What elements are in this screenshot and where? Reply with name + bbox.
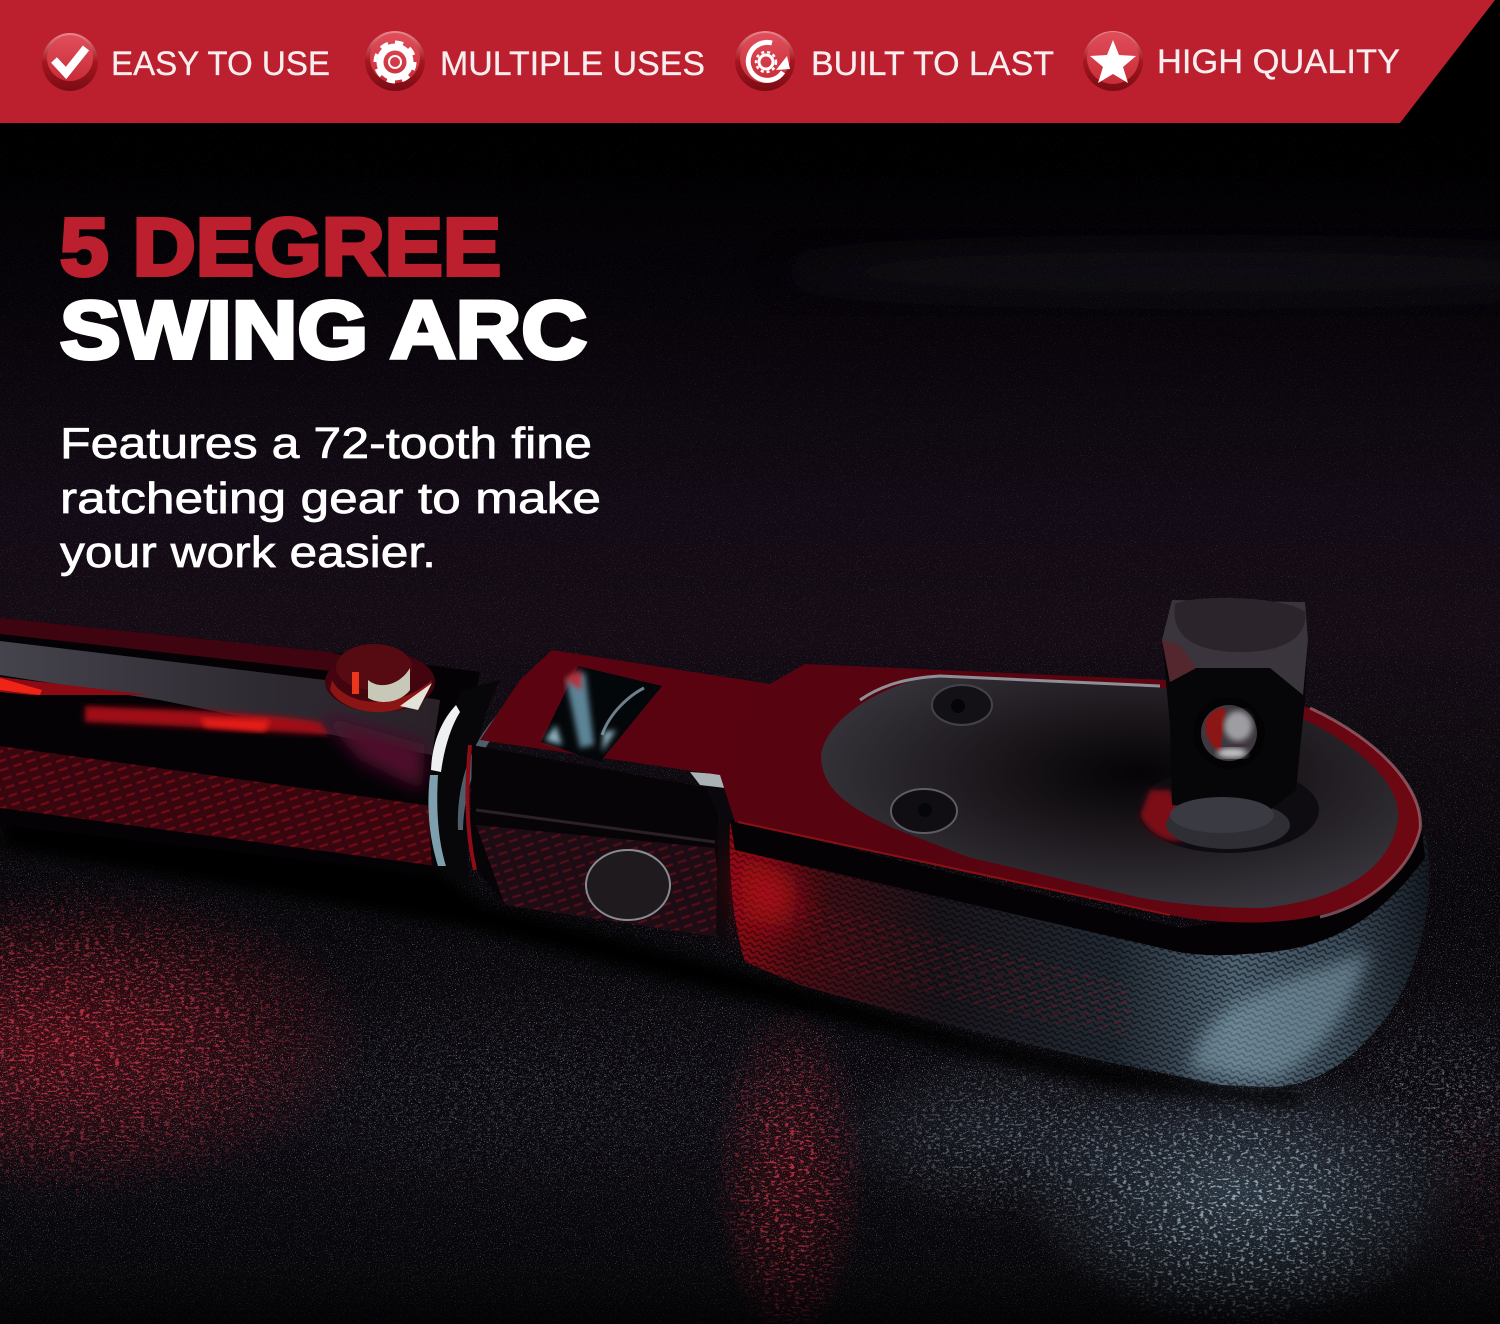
feature: easy to use bbox=[42, 33, 330, 91]
detent ball bbox=[1193, 697, 1265, 769]
icon: star bbox=[1083, 31, 1143, 91]
icon: gear bbox=[365, 31, 425, 91]
flat red head bbox=[480, 650, 1420, 922]
feature: multiple uses: MULTIPLE USES bbox=[440, 45, 705, 83]
torque wrench product bbox=[0, 598, 1429, 1106]
lower sleeve bbox=[467, 745, 745, 940]
feature: high quality bbox=[1083, 31, 1400, 91]
feature: high quality: HIGH QUALITY bbox=[1157, 43, 1400, 81]
feature: built to last bbox=[735, 31, 1054, 91]
handle bbox=[0, 618, 480, 875]
feature: easy to use: EASY TO USE bbox=[111, 45, 330, 83]
wrench head side with knurling bbox=[730, 822, 1429, 1087]
wrench shadow bbox=[0, 810, 1300, 1106]
black underside of head bbox=[730, 820, 1425, 955]
square drive bbox=[1137, 598, 1319, 853]
body text bbox=[60, 419, 601, 577]
body text: your work easier. bbox=[60, 528, 436, 577]
collar ring bbox=[428, 680, 503, 888]
icon: check mark bbox=[42, 33, 98, 91]
feature: built to last: BUILT TO LAST bbox=[811, 45, 1054, 83]
top red banner bbox=[0, 0, 1495, 123]
feature: multiple uses bbox=[365, 31, 705, 91]
heading: 5 DEGREE bbox=[60, 202, 501, 293]
plate screws bbox=[891, 685, 992, 833]
heading: SWING ARC bbox=[60, 285, 587, 376]
body text: Features a 72-tooth fine bbox=[60, 419, 592, 468]
heading bbox=[60, 202, 587, 376]
icon: gear with cycle arrow bbox=[735, 31, 795, 91]
pivot screw bbox=[325, 644, 435, 712]
body text: ratcheting gear to make bbox=[60, 474, 601, 523]
square window bbox=[541, 666, 662, 762]
ratchet cover plate bbox=[821, 676, 1398, 908]
